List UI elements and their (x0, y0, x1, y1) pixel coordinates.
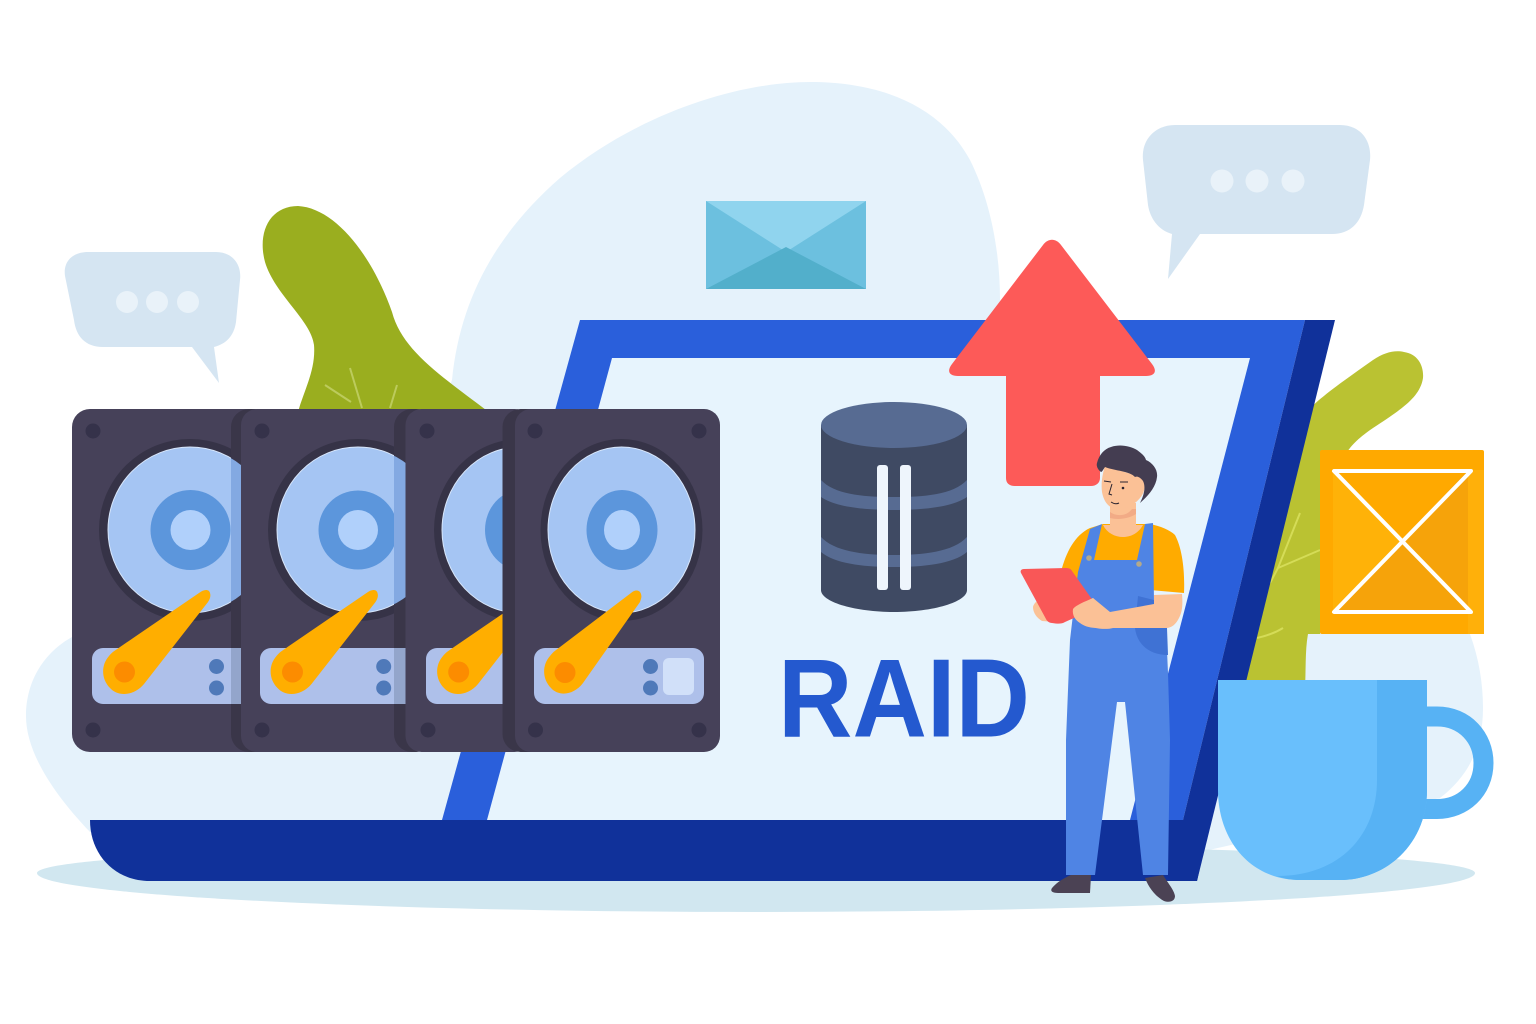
person with tablet (1021, 446, 1184, 902)
hard drive 3 (406, 409, 606, 752)
hair (1097, 446, 1157, 503)
orange envelope (1320, 450, 1484, 634)
background blob (26, 82, 1483, 852)
hard drive 4 (502, 409, 720, 752)
left plant (263, 206, 486, 412)
face (1102, 466, 1145, 509)
facial features (1104, 481, 1128, 504)
RAID label: RAID (778, 636, 1030, 760)
laptop (90, 320, 1335, 881)
tablet (1021, 568, 1096, 624)
right arm (1073, 594, 1182, 629)
red upload arrow (949, 240, 1155, 486)
icon: database cylinder (821, 402, 967, 612)
hard drive 2 (241, 409, 420, 752)
left hand behind tablet (1033, 598, 1055, 622)
front fingers (1073, 598, 1105, 628)
hard drive 1 (72, 409, 256, 752)
overall buttons (1086, 555, 1142, 567)
neck shadow (1110, 509, 1136, 519)
overalls (1066, 523, 1170, 875)
speech bubble: left (65, 252, 240, 383)
speech bubble: right (1143, 125, 1370, 279)
ground shadow (37, 843, 1475, 912)
shoes (1051, 875, 1175, 902)
right plant (1235, 351, 1423, 690)
overalls pocket shadow (1135, 596, 1168, 655)
coffee mug (1218, 680, 1484, 880)
neck (1103, 503, 1143, 537)
t-shirt (1061, 524, 1184, 593)
icon: blue envelope (706, 201, 866, 289)
